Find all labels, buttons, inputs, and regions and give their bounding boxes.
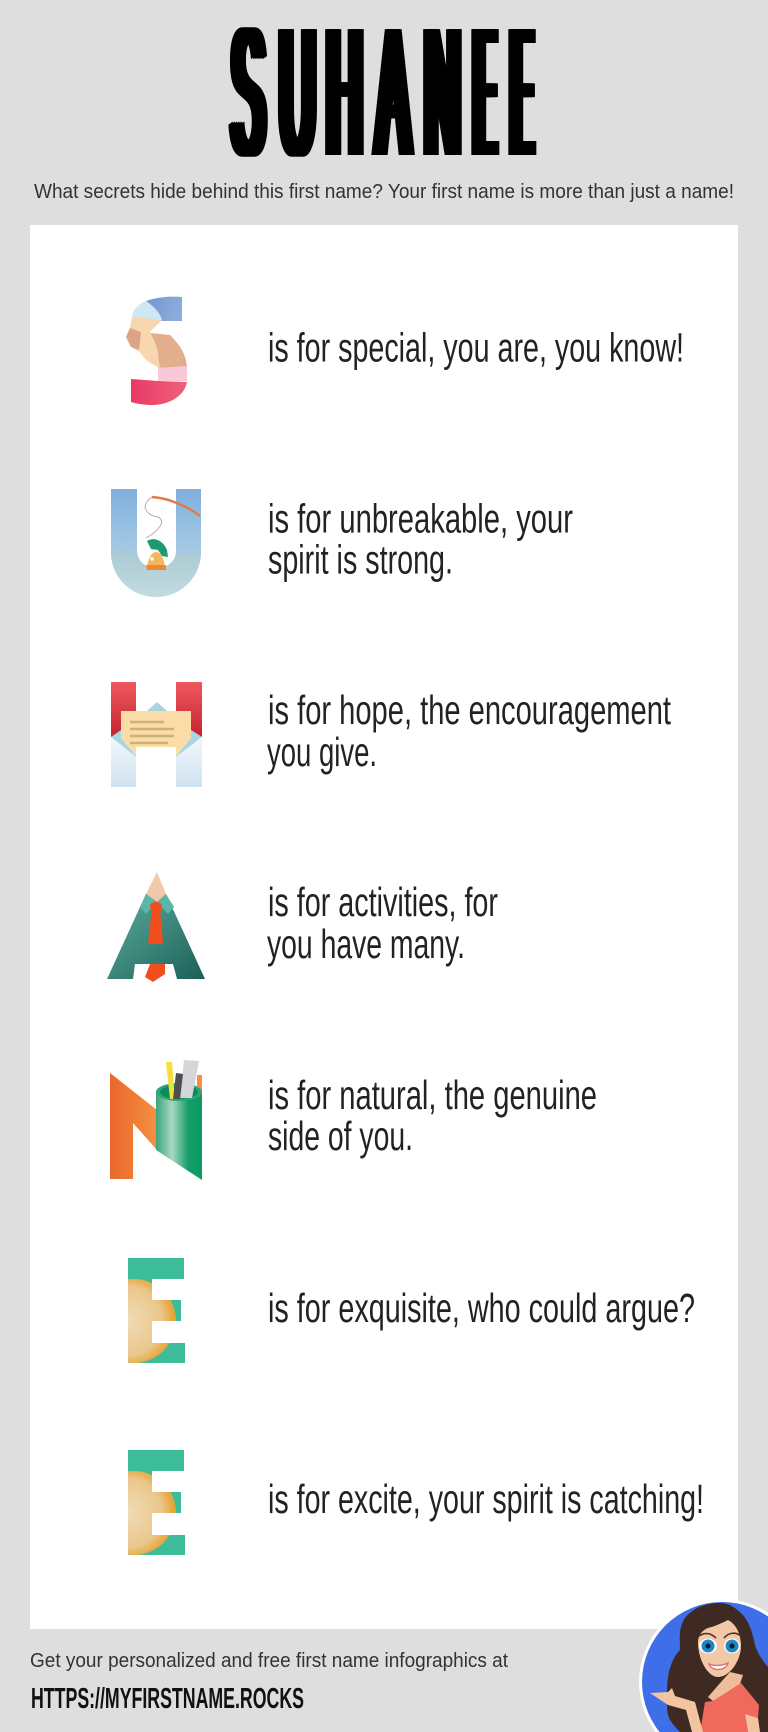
icon: letter A with tie — [107, 872, 205, 982]
text: H lines — [267, 687, 671, 775]
text: H lines: you give. — [267, 729, 377, 775]
icon: letter S with handshake — [126, 297, 187, 405]
icon: letter U with fishing — [111, 489, 201, 597]
text: N lines: side of you. — [268, 1113, 413, 1159]
text: N lines — [268, 1072, 597, 1159]
tagline: What secrets hide behind this first name? Your first name is more than just a name! — [34, 181, 734, 203]
row: letter H — [111, 682, 671, 787]
row: letter E (exquisite) — [92, 1258, 695, 1363]
icon: letter E with coin — [128, 1258, 185, 1363]
text: A lines — [267, 879, 498, 967]
title — [228, 0, 536, 170]
footer url: HTTPS://MYFIRSTNAME.ROCKS — [31, 1683, 304, 1715]
row: letter N — [110, 1060, 597, 1180]
text: A lines: is for activities, for — [268, 879, 498, 925]
row: letter E (excite) — [92, 1450, 704, 1555]
avatar: woman in circle — [639, 1599, 768, 1732]
footer text: Get your personalized and free first name infographics at — [30, 1650, 508, 1672]
row: letter A — [107, 872, 498, 982]
text: U lines: spirit is strong. — [268, 536, 453, 582]
icon: second letter E with coin — [128, 1450, 185, 1555]
row: letter U — [111, 489, 573, 597]
text: N lines: is for natural, the genuine — [268, 1072, 597, 1118]
text: U lines — [268, 496, 573, 582]
icon: letter N with pencil cup — [110, 1060, 202, 1180]
row: letter S — [126, 297, 684, 405]
icon: letter H with envelope — [111, 682, 202, 787]
panel: white letter list — [30, 225, 738, 1629]
text: U lines: is for unbreakable, your — [268, 496, 573, 542]
text: A lines: you have many. — [267, 921, 465, 967]
